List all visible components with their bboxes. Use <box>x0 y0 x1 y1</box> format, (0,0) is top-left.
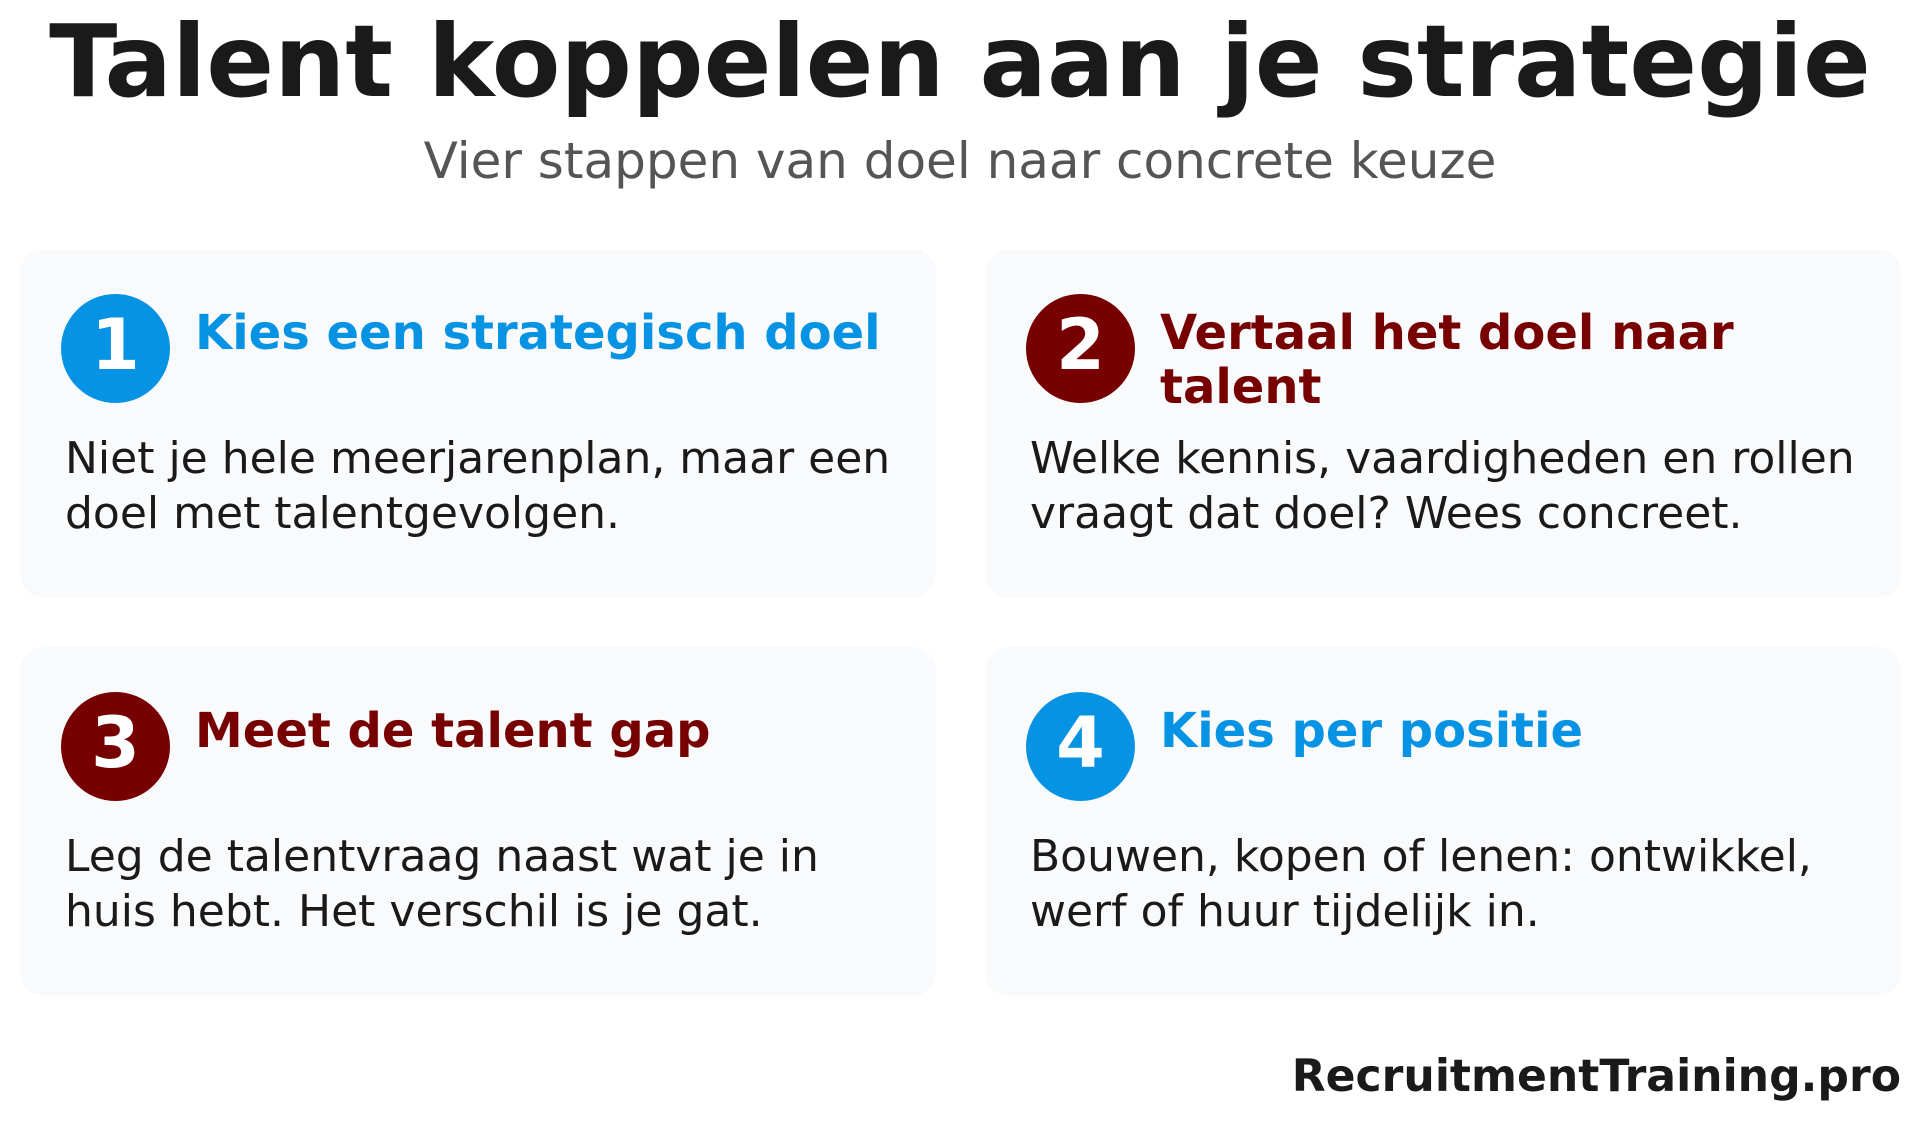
icon: number 3 <box>61 692 170 801</box>
icon: number 4: 4 <box>1056 702 1105 784</box>
panel: step 3 <box>20 647 936 996</box>
icon: number 2: 2 <box>1056 304 1105 386</box>
text: step 4: werf of huur tijdelijk in. <box>1030 886 1540 937</box>
heading: step 2: talent <box>1160 359 1321 415</box>
footer brand: RecruitmentTraining.pro <box>1292 1051 1901 1102</box>
panel: step 4 <box>985 647 1901 996</box>
subtitle: Vier stappen van doel naar concrete keuze <box>424 132 1496 190</box>
text: step 2: vraagt dat doel? Wees concreet. <box>1030 488 1743 539</box>
text: step 1: doel met talentgevolgen. <box>65 488 620 539</box>
heading: step 4: Kies per positie <box>1160 703 1583 759</box>
text: step 2: Welke kennis, vaardigheden en rollen <box>1030 433 1855 484</box>
heading: step 1: Kies een strategisch doel <box>195 305 881 361</box>
panel: step 1 <box>20 249 936 598</box>
panel: step 2 <box>985 249 1901 598</box>
icon: number 4 <box>1026 692 1135 801</box>
heading: step 2: Vertaal het doel naar <box>1160 305 1734 361</box>
icon: number 3: 3 <box>91 702 140 784</box>
icon: number 1 <box>61 294 170 403</box>
icon: number 2 <box>1026 294 1135 403</box>
text: step 3: huis hebt. Het verschil is je gat. <box>65 886 763 937</box>
text: step 3: Leg de talentvraag naast wat je in <box>65 831 819 882</box>
text: step 4: Bouwen, kopen of lenen: ontwikkel, <box>1030 831 1812 882</box>
icon: number 1: 1 <box>91 304 140 386</box>
text: step 1: Niet je hele meerjarenplan, maar een <box>65 433 890 484</box>
title: Talent koppelen aan je strategie <box>49 3 1871 120</box>
heading: step 3: Meet de talent gap <box>195 703 710 759</box>
